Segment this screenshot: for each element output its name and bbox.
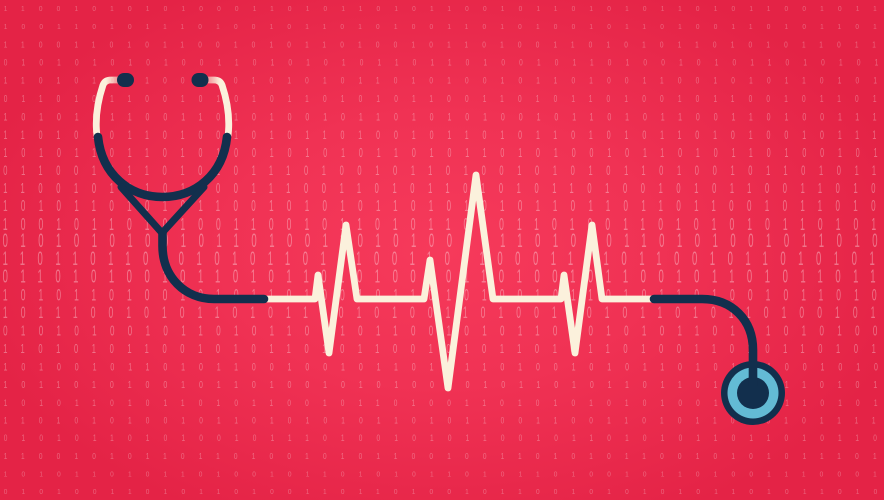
binary digit background pattern: 01010100101101011001011001010110101010110101010100 xyxy=(3,322,884,339)
binary digit background pattern: 01101011001010101101010110011010110100101100101101 xyxy=(4,94,884,104)
stethoscope headset and tube xyxy=(96,73,264,299)
binary digit background pattern: 10101101011010010110101011010110100101101001110001 xyxy=(4,471,884,479)
binary digit background pattern: 11010101001011010101011010110011001101011010101111 xyxy=(4,415,884,426)
binary digit background pattern: 01010101001011010011010100101101010110101001011010 xyxy=(3,230,884,252)
binaural arc xyxy=(98,137,227,197)
right ear tube xyxy=(207,80,229,136)
binary digit background pattern: 11001010110110100101011001001101010110010101011101 xyxy=(4,451,884,461)
binary digit background pattern: 01100101101010111010010110100101010110100101101011 xyxy=(3,164,884,179)
binary digit background pattern: 01010101010011010101011011010010110100101011010101 xyxy=(4,58,884,68)
left ear tip xyxy=(117,73,134,87)
binary digit background pattern: 11001010101000110101101011001011010101101011001011 xyxy=(4,6,884,13)
binary digit background pattern: 10101101101010010101011010110101001011010110100101 xyxy=(4,147,884,161)
binary digit background pattern: 11001101011001010110100101101001101010110101011011 xyxy=(4,40,884,50)
heartbeat line xyxy=(265,175,652,388)
binary digit background pattern: 10101101010110010101011010101011011011011001011010 xyxy=(3,197,884,215)
binary digit background pattern: 11011011010101011010100110110001101011001011010101 xyxy=(3,248,884,270)
binary digit background pattern: 10101011001101010010110101010010110101100110100111 xyxy=(4,111,884,123)
binary digit background pattern: 10111001010110101100101001101001101011010110100101 xyxy=(3,303,884,322)
Y connector xyxy=(121,187,204,233)
right ear tip xyxy=(192,73,208,87)
binary digit background pattern: 11010101100101011010110010101101011010011010110101 xyxy=(3,343,884,357)
binary digit background pattern: 10101101001010110100101101010010110101101001011010 xyxy=(3,285,884,304)
binary digit background pattern: 11010101101001010110100101101011010101101010010111 xyxy=(4,129,884,143)
binary digit background pattern: 10110101001011010010101001010110101101101010110101 xyxy=(4,379,884,390)
main tube xyxy=(162,232,264,299)
chest piece tube and diaphragm xyxy=(654,299,785,425)
diaphragm outer ring xyxy=(721,361,785,425)
binary digit background pattern: 10011010111010010110101001101010010110100110101101 xyxy=(4,24,884,31)
binary digit background pattern: 11001010101100111001101011010101101001010110011010 xyxy=(3,180,884,197)
diaphragm blue ring xyxy=(728,368,778,418)
diaphragm centre xyxy=(737,377,769,409)
binary digit background pattern: 10100101101011001001011010110100101011010101001010 xyxy=(4,361,884,373)
binary digit background pattern: 10010110101001100101101011010110100110101010110101 xyxy=(3,213,884,234)
binary digit background pattern: 10101101011010110010110100110101010101001010110101 xyxy=(4,398,884,408)
binary digit background pattern: 01010011010110100110110100101100101010101101011010 xyxy=(4,489,884,496)
binary digit background pattern: 11010101100110101010110101001011010011001010110101 xyxy=(4,75,884,86)
binary digit background pattern: 01101010010110101101010010110100101100101101011011 xyxy=(3,267,884,288)
binary digit background pattern: 01010110101001011101001010110010110101011011010110 xyxy=(4,433,884,443)
tube stem over ring xyxy=(749,362,757,386)
left ear tube xyxy=(96,80,118,136)
tube to chest piece xyxy=(654,299,753,370)
